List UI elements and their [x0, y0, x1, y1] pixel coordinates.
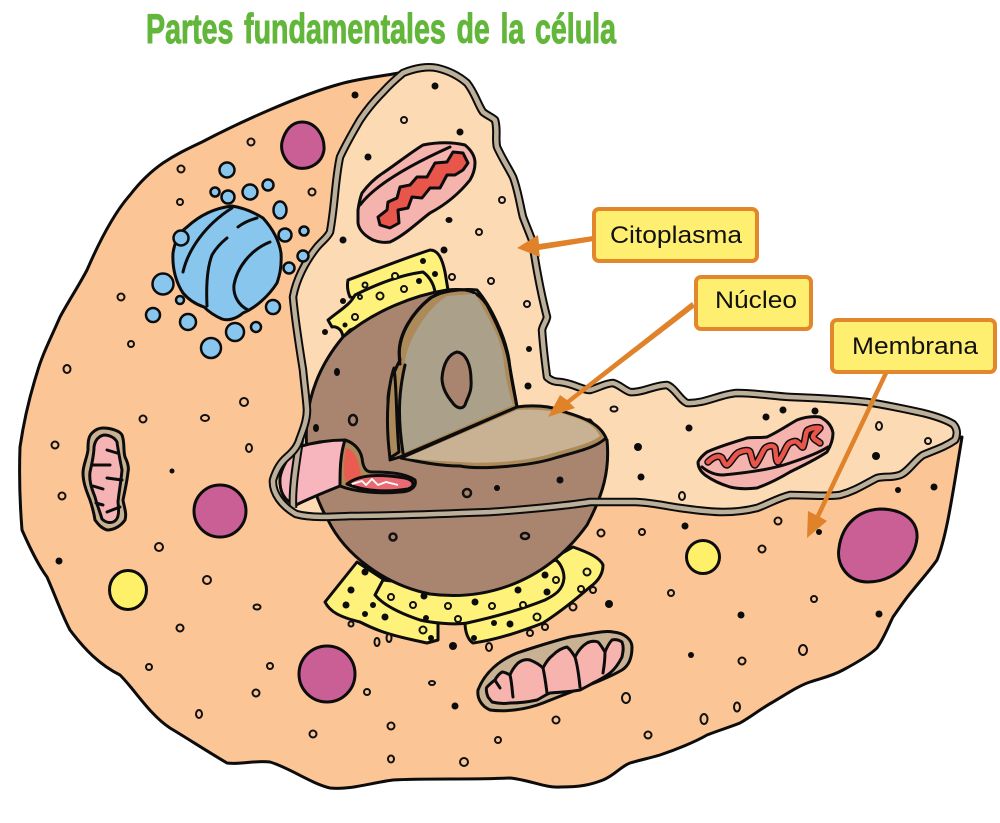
arrow: citoplasma — [517, 235, 594, 257]
mitochondrion: right — [698, 417, 833, 489]
nucleolus — [442, 352, 471, 408]
label: nucleo: Núcleo — [715, 287, 797, 314]
rough endoplasmic reticulum: upper — [328, 250, 448, 337]
golgi apparatus — [173, 206, 281, 320]
label: membrana — [832, 320, 995, 372]
mitochondrion: bottom — [478, 631, 632, 711]
dots in cut cytoplasm — [322, 82, 931, 500]
membrane — [273, 67, 957, 517]
nucleus: tunnel with mitochondrion section — [280, 440, 415, 505]
nucleus: sphere — [306, 290, 608, 595]
label: citoplasma: Citoplasma — [610, 222, 743, 249]
nucleus: back wall — [387, 289, 517, 460]
title: Partes fundamentales de la célula — [146, 5, 616, 52]
rough endoplasmic reticulum: lower — [325, 547, 603, 643]
cytoplasm: cut section — [273, 67, 957, 517]
label: membrana: Membrana — [852, 333, 979, 360]
mitochondrion: top — [358, 143, 475, 242]
golgi vesicles — [146, 162, 308, 358]
label: nucleo — [696, 277, 811, 329]
label: citoplasma — [594, 209, 757, 261]
arrow: membrana — [807, 372, 888, 538]
mitochondrion: left — [83, 428, 128, 530]
vacuoles: yellow — [110, 540, 720, 610]
black granules — [56, 92, 938, 710]
nucleus: floor section — [401, 406, 606, 468]
arrow: nucleo — [548, 302, 695, 417]
cytoplasm organelle dots — [52, 138, 817, 766]
nucleus: pores — [313, 368, 564, 491]
lysosomes: purple — [194, 122, 917, 702]
